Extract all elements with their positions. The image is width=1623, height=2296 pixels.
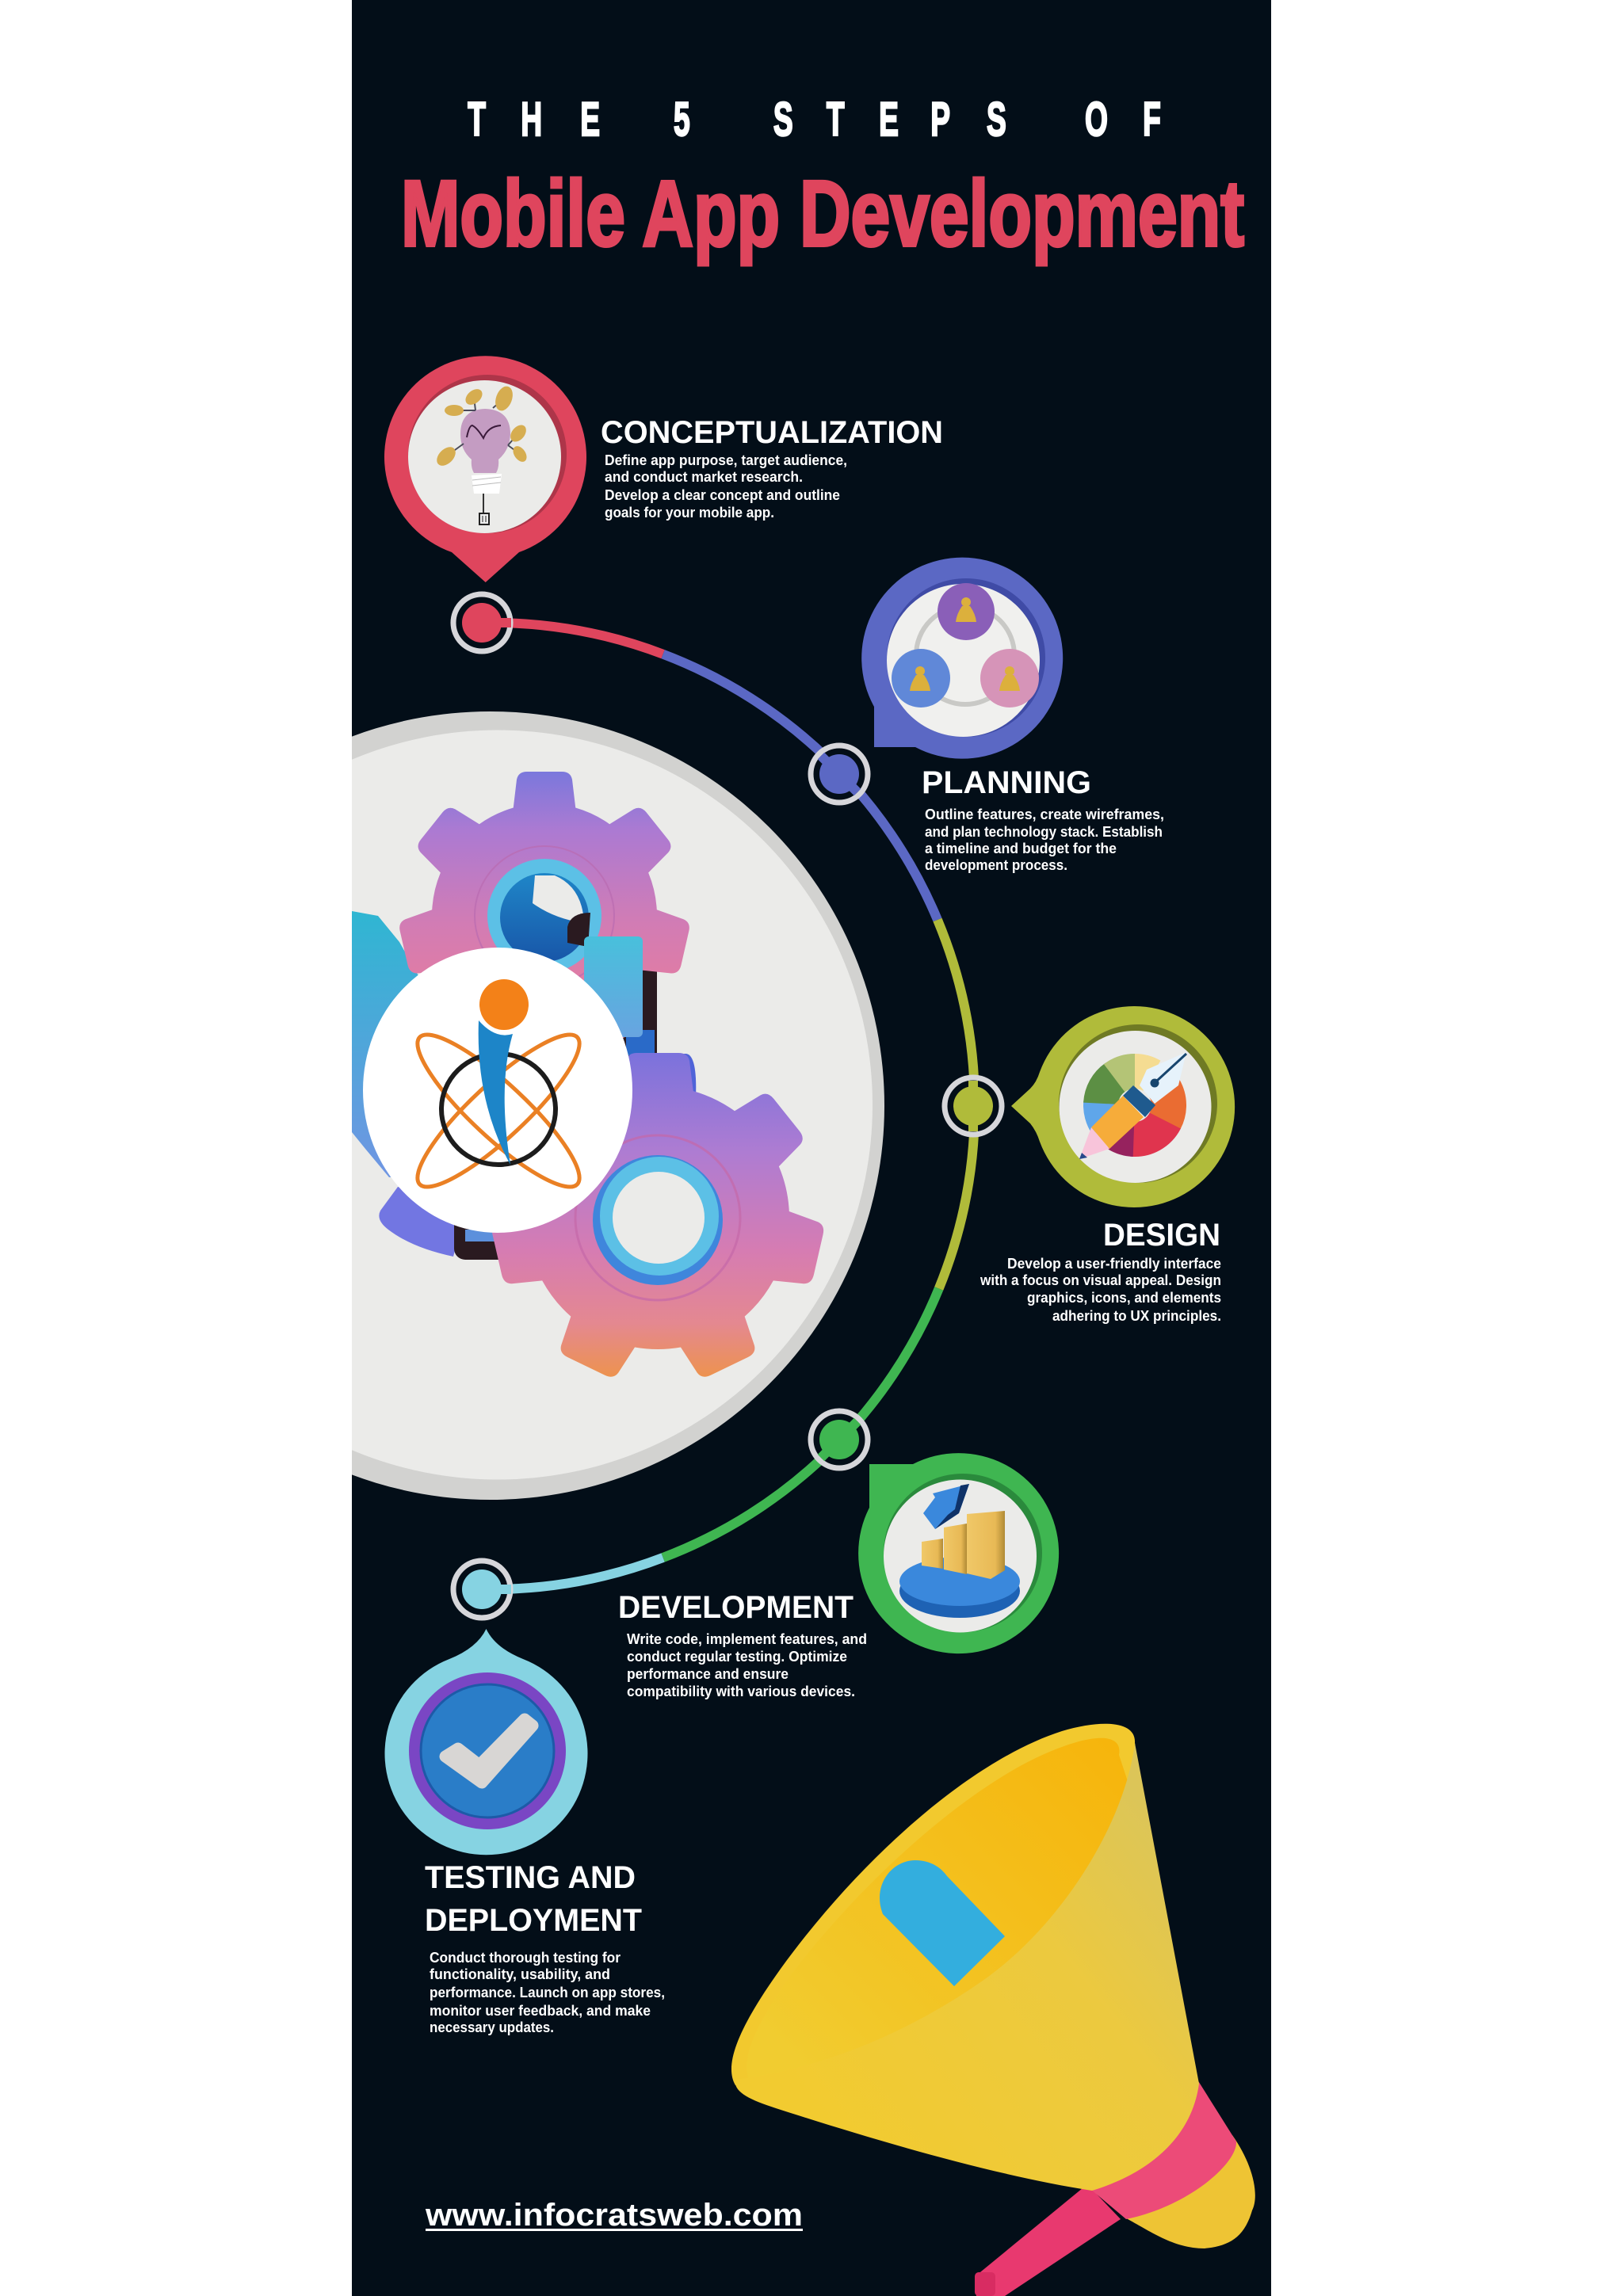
megaphone: mouth rim and inside bbox=[731, 1724, 1145, 2085]
person: blue bbox=[892, 649, 950, 707]
text: planning description bbox=[925, 807, 1164, 873]
heading: testing and deployment: TESTING AND bbox=[425, 1860, 636, 1895]
heading: planning: PLANNING bbox=[922, 765, 1091, 800]
logo: orange dot bbox=[479, 979, 529, 1030]
pin: olive bbox=[1011, 1006, 1235, 1207]
text: design description: Develop a user-friendly interface bbox=[1007, 1256, 1221, 1272]
megaphone: pink band bbox=[1090, 2080, 1236, 2219]
node: step 5 bbox=[453, 1561, 511, 1618]
heading: design: DESIGN bbox=[1103, 1218, 1220, 1253]
logo: orange atom orbits bbox=[415, 1033, 582, 1188]
text: testing description bbox=[430, 1950, 665, 2035]
icon: bar chart on disc with arrow bbox=[899, 1484, 1020, 1618]
text: development description: conduct regular testing. Optimize bbox=[627, 1649, 847, 1665]
central disc with gears and logo bbox=[352, 711, 884, 1500]
timeline arc bbox=[483, 623, 975, 1589]
node: step 4 bbox=[811, 1411, 868, 1468]
disc bbox=[352, 711, 884, 1500]
pin: cyan bbox=[385, 1629, 588, 1855]
text: testing description: functionality, usability, and bbox=[430, 1966, 610, 1982]
pin: blue bbox=[861, 558, 1063, 759]
illustration: light blue card bbox=[584, 936, 643, 1037]
illustration: blue back shape bbox=[352, 911, 418, 1177]
panel: dark background bbox=[352, 0, 1271, 2296]
heading: testing and deployment bbox=[425, 1860, 642, 1938]
megaphone: handle bbox=[975, 2184, 1121, 2296]
text: conceptualization description: Develop a clear concept and outline bbox=[605, 487, 840, 503]
text: planning description: Outline features, create wireframes, bbox=[925, 807, 1164, 822]
title: mobile app development: Mobile App Development bbox=[401, 162, 1244, 266]
heading: conceptualization: CONCEPTUALIZATION bbox=[601, 415, 943, 450]
megaphone: cone body bbox=[735, 1743, 1199, 2191]
pin: green bbox=[858, 1453, 1059, 1653]
step 3: design bbox=[980, 1006, 1235, 1324]
logo: white badge bbox=[363, 948, 632, 1233]
megaphone: rear cap bbox=[1126, 2135, 1255, 2248]
logo: black ring bbox=[441, 1054, 556, 1165]
megaphone illustration bbox=[731, 1724, 1255, 2296]
icon: check badge bbox=[409, 1672, 566, 1829]
step 5: testing and deployment bbox=[385, 1629, 665, 2035]
text: testing description: necessary updates. bbox=[430, 2019, 554, 2035]
person: pink bbox=[980, 649, 1039, 707]
text: design description: with a focus on visual appeal. Design bbox=[980, 1272, 1221, 1288]
step 4: development bbox=[618, 1453, 1059, 1699]
text: design description: graphics, icons, and elements bbox=[1027, 1290, 1221, 1306]
text: planning description: and plan technology stack. Establish bbox=[925, 824, 1163, 840]
illustration: phone behind the gears bbox=[454, 970, 657, 1260]
text: testing description: Conduct thorough testing for bbox=[430, 1950, 621, 1966]
illustration: lower-left gear piece bbox=[379, 1187, 455, 1257]
heading: development: DEVELOPMENT bbox=[618, 1590, 854, 1625]
text: development description: Write code, implement features, and bbox=[627, 1631, 867, 1647]
icon: three people bbox=[892, 583, 1039, 707]
text: testing description: performance. Launch on app stores, bbox=[430, 1985, 665, 2000]
person: purple bbox=[938, 583, 995, 640]
step 2: planning bbox=[861, 558, 1164, 873]
text: design description: adhering to UX principles. bbox=[1052, 1308, 1221, 1324]
node: step 1 bbox=[453, 594, 511, 651]
text: planning description: a timeline and budget for the bbox=[925, 841, 1117, 856]
node: step 3 bbox=[945, 1077, 1002, 1135]
illustration: upper gear bbox=[399, 772, 689, 1038]
logo: blue stem bbox=[479, 1020, 513, 1165]
icon: light bulb with leaves bbox=[433, 384, 529, 524]
text: conceptualization description: Define app purpose, target audience, bbox=[605, 452, 847, 468]
text: conceptualization description: and conduct market research. bbox=[605, 469, 803, 485]
icon: colour wheel and pen bbox=[1079, 1052, 1186, 1159]
step 1: conceptualization bbox=[384, 356, 943, 582]
illustration: lower gear bbox=[483, 1050, 832, 1386]
heading: testing and deployment: DEPLOYMENT bbox=[425, 1903, 642, 1938]
text: design description bbox=[980, 1256, 1221, 1324]
node: step 2 bbox=[811, 746, 868, 803]
text: conceptualization description bbox=[605, 452, 847, 521]
pin: red bbox=[384, 356, 586, 582]
text: development description: compatibility with various devices. bbox=[627, 1684, 855, 1699]
text: testing description: monitor user feedback, and make bbox=[430, 2003, 651, 2019]
website url: www.infocratsweb.com bbox=[425, 2198, 803, 2233]
text: development description: performance and ensure bbox=[627, 1666, 789, 1682]
text: conceptualization description: goals for your mobile app. bbox=[605, 505, 774, 521]
megaphone: blue pill bbox=[880, 1860, 1005, 1986]
title: the 5 steps of: THE 5 STEPS OF bbox=[468, 93, 1161, 146]
text: development description bbox=[627, 1631, 867, 1699]
text: planning description: development process. bbox=[925, 857, 1067, 873]
